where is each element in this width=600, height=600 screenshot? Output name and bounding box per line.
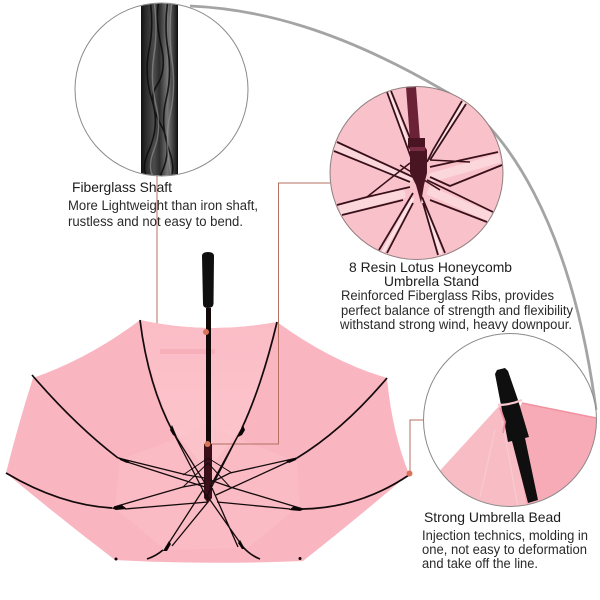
canopy inner vent xyxy=(115,425,300,550)
bead dot on hub xyxy=(204,441,210,447)
text: honeycomb stand heading: Umbrella Stand xyxy=(384,273,479,289)
umbrella ribs xyxy=(6,320,409,559)
bead dot on shaft xyxy=(203,329,209,335)
bead canopy left xyxy=(440,406,526,506)
bead canopy fold xyxy=(480,420,518,507)
carbon shaft xyxy=(141,0,178,180)
light weave lines xyxy=(150,0,174,180)
text: fiberglass shaft description: rustless and not easy to bend. xyxy=(68,214,243,229)
stand hub xyxy=(408,138,427,203)
text: umbrella bead description: Injection technics, molding in xyxy=(422,528,588,543)
rib joints xyxy=(111,425,305,560)
bead shaft and tip xyxy=(495,368,538,503)
umbrella handle xyxy=(202,252,214,308)
umbrella shaft xyxy=(206,308,211,444)
text: umbrella bead description: and take off the line. xyxy=(422,556,538,571)
text: umbrella bead description xyxy=(422,528,588,571)
text: umbrella bead description: one, not easy to deformation xyxy=(422,542,587,557)
text: honeycomb stand description: Reinforced Fiberglass Ribs, provides xyxy=(341,288,554,303)
dark weave lines xyxy=(144,0,173,180)
circle detail: umbrella bead xyxy=(423,333,597,507)
umbrella hub xyxy=(204,444,212,503)
text: honeycomb stand description: withstand strong wind, heavy downpour. xyxy=(339,317,572,332)
text: honeycomb stand heading xyxy=(349,259,512,289)
text: umbrella bead heading: Strong Umbrella Bead xyxy=(424,509,561,525)
text: fiberglass shaft heading: Fiberglass Shaft xyxy=(72,179,172,195)
bead canopy right xyxy=(520,403,596,504)
pink bead cord xyxy=(498,400,522,405)
pale narrow bands xyxy=(383,92,464,254)
stand ribs xyxy=(334,91,502,255)
circle detail: fiberglass shaft xyxy=(75,0,248,180)
text: honeycomb stand description: perfect balance of strength and flexibility xyxy=(341,303,573,318)
text: honeycomb stand description xyxy=(339,288,573,332)
leader line: honeycomb stand xyxy=(208,183,330,444)
canopy edge xyxy=(522,403,596,418)
umbrella illustration xyxy=(6,183,423,563)
text: honeycomb stand heading: 8 Resin Lotus Honeycomb xyxy=(349,259,512,275)
stand shaft xyxy=(406,87,420,140)
text: fiberglass shaft description: More Lightweight than iron shaft, xyxy=(68,198,258,213)
pale rib bands xyxy=(335,146,500,217)
umbrella canopy xyxy=(6,320,409,563)
leader line: fiberglass shaft xyxy=(157,176,206,331)
canopy label mark xyxy=(160,349,215,354)
hub collar xyxy=(410,147,425,151)
canopy top panel xyxy=(140,320,277,470)
text: fiberglass shaft description xyxy=(68,198,258,229)
cord tail xyxy=(500,408,505,433)
leader line: umbrella bead xyxy=(410,420,423,473)
circle detail: honeycomb stand xyxy=(330,86,503,260)
gray sweeping arc xyxy=(190,6,596,410)
bead dot on rib tip xyxy=(406,470,412,476)
